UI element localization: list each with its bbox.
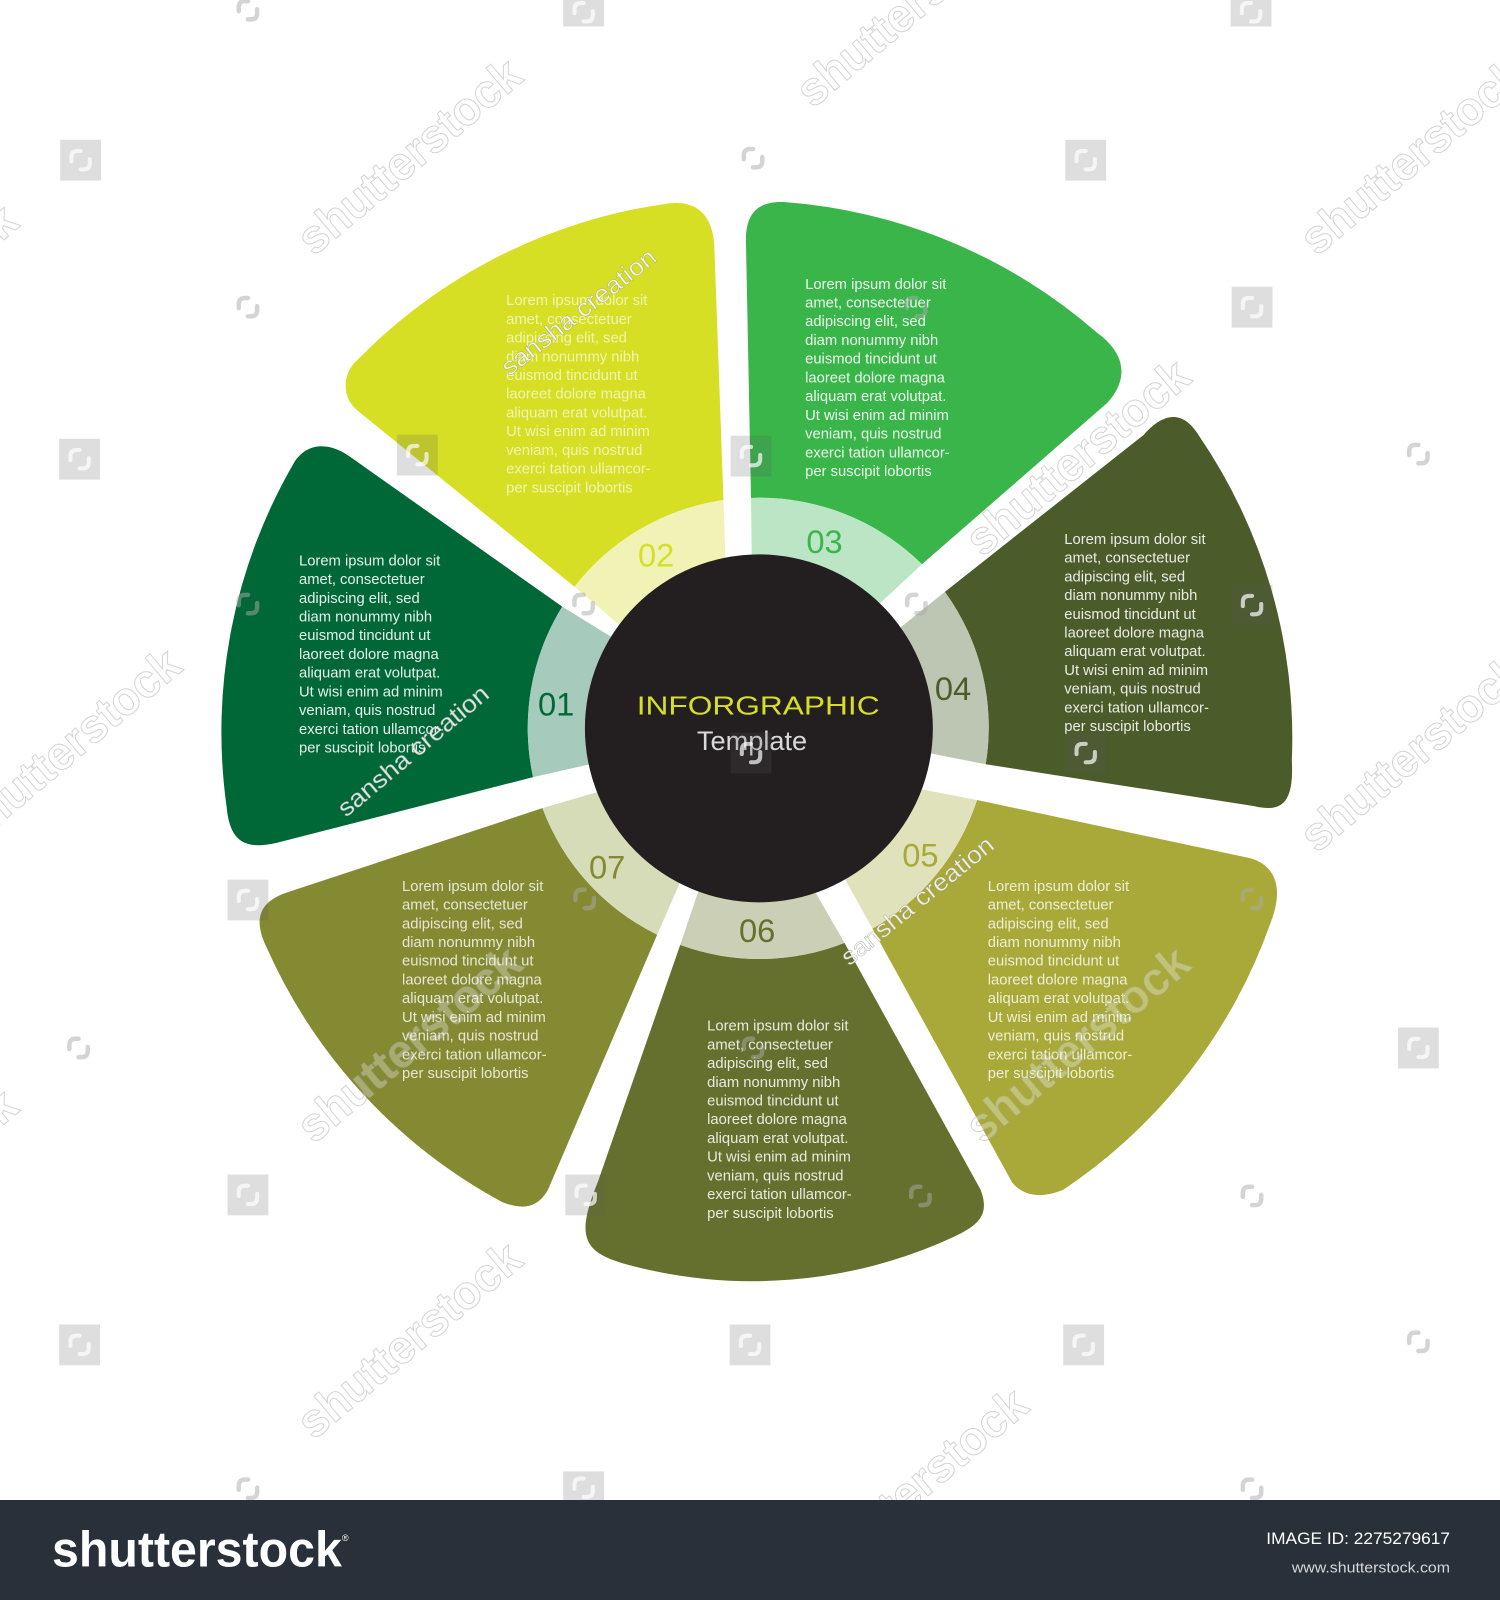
- text block 02: amet, consectetuer: [506, 312, 632, 328]
- number 02: 02: [638, 536, 674, 573]
- number 05: 05: [902, 836, 939, 873]
- footer image id: IMAGE ID: 2275279617: [1266, 1529, 1450, 1548]
- text block 02: adipiscing elit, sed: [506, 331, 627, 347]
- text block 02: euismod tincidunt ut: [506, 368, 638, 384]
- number 07: 07: [589, 849, 625, 886]
- text block 01: diam nonummy nibh: [299, 609, 432, 625]
- text block 07: adipiscing elit, sed: [402, 916, 523, 932]
- text block 02: exerci tation ullamcor-: [506, 462, 651, 478]
- text block 05: amet, consectetuer: [988, 898, 1114, 914]
- panel: segment 06: [586, 867, 984, 1281]
- text block 04: Lorem ipsum dolor sit: [1064, 532, 1206, 548]
- text block 03: diam nonummy nibh: [805, 333, 938, 349]
- number 06: 06: [739, 912, 775, 949]
- petal 06 shape: [586, 943, 984, 1281]
- text block 06: diam nonummy nibh: [707, 1075, 840, 1091]
- text block 03: laoreet dolore magna: [805, 370, 946, 386]
- text block 05: per suscipit lobortis: [988, 1066, 1114, 1082]
- text block 03: Lorem ipsum dolor sit: [805, 277, 946, 293]
- text block 03: amet, consectetuer: [805, 295, 931, 311]
- text block 02: aliquam erat volutpat.: [506, 405, 647, 421]
- text block 07: diam nonummy nibh: [402, 935, 535, 951]
- text block 01: per suscipit lobortis: [299, 741, 425, 757]
- petal 02 shape: [346, 203, 723, 587]
- footer band: [0, 1500, 1500, 1600]
- ring tab 04: [878, 592, 989, 764]
- text block 04: Ut wisi enim ad minim: [1064, 663, 1208, 679]
- text block 03: per suscipit lobortis: [805, 464, 932, 480]
- text block 04: amet, consectetuer: [1064, 551, 1190, 567]
- text block 05: Ut wisi enim ad minim: [988, 1010, 1132, 1026]
- text block 01: Ut wisi enim ad minim: [299, 684, 443, 700]
- text block 07: exerci tation ullamcor-: [402, 1047, 547, 1063]
- text block 02: Lorem ipsum dolor sit: [506, 293, 647, 309]
- text block 07: Ut wisi enim ad minim: [402, 1010, 546, 1026]
- footer registered mark: ®: [342, 1533, 349, 1543]
- text block 07: aliquam erat volutpat.: [402, 991, 543, 1007]
- text block 06: Lorem ipsum dolor sit: [707, 1019, 848, 1035]
- text block 04: veniam, quis nostrud: [1064, 682, 1201, 698]
- watermark: shutterstock diagonal text: shutterstock: [287, 935, 532, 1152]
- text block 06: exerci tation ullamcor-: [707, 1187, 852, 1203]
- ring tab 01: [528, 607, 628, 777]
- text block 02: per suscipit lobortis: [506, 480, 633, 496]
- text block 04: diam nonummy nibh: [1064, 588, 1197, 604]
- text block 05: euismod tincidunt ut: [988, 954, 1119, 970]
- watermark: shutterstock diagonal text: shutterstock: [287, 1231, 532, 1448]
- text block 04: exerci tation ullamcor-: [1064, 700, 1209, 716]
- number 04: 04: [935, 670, 971, 707]
- ring tab 02: [574, 500, 727, 645]
- panel: segment 07: [260, 785, 689, 1207]
- text block 05: aliquam erat volutpat.: [988, 991, 1129, 1007]
- ring tab 05: [832, 785, 977, 929]
- petal 03 shape: [746, 202, 1121, 564]
- text block 07: Lorem ipsum dolor sit: [402, 879, 543, 895]
- petal 01 shape: [221, 446, 562, 845]
- text block 06: adipiscing elit, sed: [707, 1056, 828, 1072]
- text block 02: veniam, quis nostrud: [506, 443, 643, 459]
- text block 03: veniam, quis nostrud: [805, 427, 941, 443]
- center hub: [585, 554, 933, 902]
- text block 01: laoreet dolore magna: [299, 647, 439, 663]
- text block 05: adipiscing elit, sed: [988, 916, 1109, 932]
- text block 07: amet, consectetuer: [402, 898, 528, 914]
- text block 03: adipiscing elit, sed: [805, 314, 926, 330]
- text block 06: veniam, quis nostrud: [707, 1168, 844, 1184]
- panel: segment 04: [878, 417, 1292, 808]
- title: INFORGRAPHIC: [637, 692, 880, 720]
- text block 06: Ut wisi enim ad minim: [707, 1150, 851, 1166]
- text block 03: euismod tincidunt ut: [805, 352, 937, 368]
- hub circle: [585, 554, 933, 902]
- footer background: [0, 1500, 1500, 1600]
- ring tab 07: [542, 785, 689, 935]
- text block 04: euismod tincidunt ut: [1064, 607, 1196, 623]
- watermark: sansha creation text: sansha creation: [496, 244, 662, 381]
- text block 07: euismod tincidunt ut: [402, 954, 534, 970]
- subtitle: Template: [697, 726, 807, 756]
- watermark: sansha creation text: sansha creation: [836, 831, 1000, 971]
- text block 01: Lorem ipsum dolor sit: [299, 553, 440, 569]
- text block 06: amet, consectetuer: [707, 1037, 833, 1053]
- watermark: shutterstock diagonal text: shutterstock: [955, 348, 1200, 566]
- text block 05: laoreet dolore magna: [988, 972, 1128, 988]
- ring tab 03: [751, 498, 922, 624]
- text block 03: exerci tation ullamcor-: [805, 445, 950, 461]
- text block 04: laoreet dolore magna: [1064, 625, 1205, 641]
- text block 04: aliquam erat volutpat.: [1064, 644, 1206, 660]
- text block 07: veniam, quis nostrud: [402, 1029, 538, 1045]
- watermark: shutterstock diagonal text: shutterstock: [955, 935, 1200, 1152]
- watermark: sansha creation text: sansha creation: [333, 680, 495, 822]
- text block 01: euismod tincidunt ut: [299, 628, 430, 644]
- footer logo: shutterstock: [52, 1521, 342, 1577]
- text block 02: diam nonummy nibh: [506, 349, 639, 365]
- footer url: www.shutterstock.com: [1291, 1560, 1450, 1576]
- text block 06: euismod tincidunt ut: [707, 1094, 839, 1110]
- text block 01: exerci tation ullamcor-: [299, 722, 444, 738]
- text block 05: Lorem ipsum dolor sit: [988, 879, 1129, 895]
- text block 05: diam nonummy nibh: [988, 935, 1121, 951]
- text block 01: adipiscing elit, sed: [299, 591, 420, 607]
- number 03: 03: [806, 523, 843, 560]
- watermark: sansha creation text: [333, 244, 1000, 971]
- text block 06: per suscipit lobortis: [707, 1206, 834, 1222]
- petal 05 shape: [872, 800, 1277, 1195]
- watermark: shutterstock diagonal text: shutterstock: [793, 1377, 1038, 1594]
- watermark: shutterstock diagonal text: shutterstock: [287, 47, 532, 265]
- panel: segment 02: [346, 203, 727, 645]
- text block 01: aliquam erat volutpat.: [299, 666, 440, 682]
- panel: segment 05: [832, 785, 1277, 1195]
- text block 03: Ut wisi enim ad minim: [805, 408, 949, 424]
- text block 02: Ut wisi enim ad minim: [506, 424, 650, 440]
- text block 07: laoreet dolore magna: [402, 972, 543, 988]
- text block 03: aliquam erat volutpat.: [805, 389, 946, 405]
- panel: segment 03: [746, 202, 1121, 624]
- text block 01: amet, consectetuer: [299, 572, 425, 588]
- petal 04 shape: [945, 417, 1292, 808]
- petal 07 shape: [260, 808, 657, 1207]
- panel: segment 01: [221, 446, 628, 845]
- number 01: 01: [538, 685, 574, 722]
- text block 06: aliquam erat volutpat.: [707, 1131, 848, 1147]
- text block 06: laoreet dolore magna: [707, 1112, 848, 1128]
- text block 01: veniam, quis nostrud: [299, 703, 435, 719]
- text block 05: exerci tation ullamcor-: [988, 1047, 1132, 1063]
- text block 07: per suscipit lobortis: [402, 1066, 529, 1082]
- ring tab 06: [680, 867, 844, 959]
- text block 05: veniam, quis nostrud: [988, 1029, 1124, 1045]
- text block 02: laoreet dolore magna: [506, 387, 647, 403]
- text block 04: adipiscing elit, sed: [1064, 569, 1185, 585]
- text block 04: per suscipit lobortis: [1064, 719, 1191, 735]
